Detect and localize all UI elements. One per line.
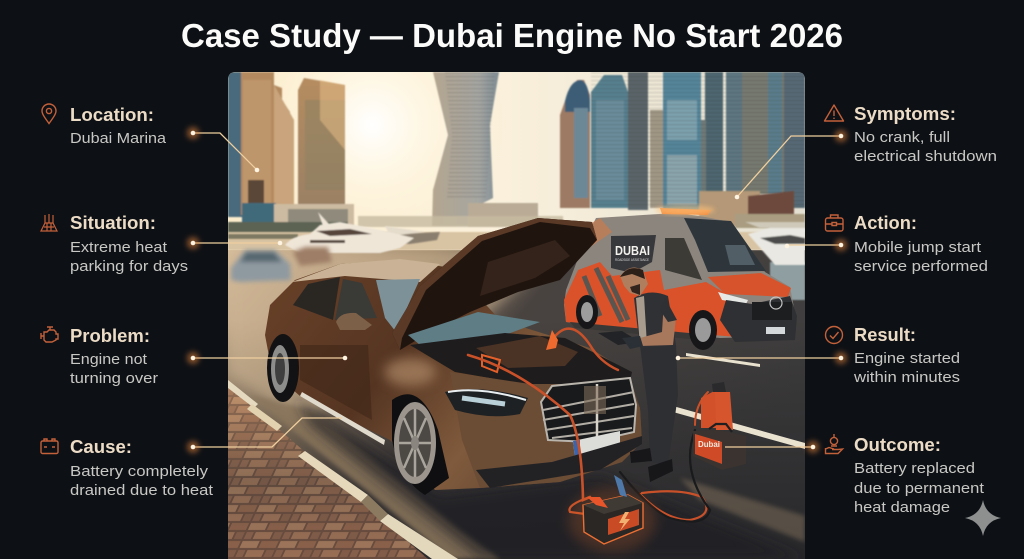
door panel sheen xyxy=(300,345,372,420)
van body xyxy=(564,213,796,338)
icon: engine xyxy=(41,327,58,342)
title: Case Study — Dubai Engine No Start 2026 xyxy=(181,17,843,54)
licence plate xyxy=(573,431,620,459)
callout line: location xyxy=(187,127,259,172)
text block xyxy=(70,351,158,387)
panel: situation xyxy=(41,212,188,275)
windshield xyxy=(684,218,766,272)
panel: location xyxy=(42,104,167,147)
panel: problem xyxy=(41,325,158,387)
low buildings right xyxy=(699,191,805,228)
lower bumper xyxy=(476,436,642,488)
icon: heat over parked car xyxy=(41,214,57,231)
clamp on engine xyxy=(546,330,558,350)
panel: outcome xyxy=(826,434,985,516)
icon: briefcase xyxy=(826,215,843,231)
car body xyxy=(265,260,642,490)
van headlight xyxy=(718,292,748,304)
rear wheel xyxy=(267,334,299,402)
text block xyxy=(854,129,997,165)
text block: heat damage xyxy=(854,499,950,516)
icon: check circle xyxy=(826,326,842,344)
callout line: symptoms xyxy=(735,130,847,199)
text block: Engine started xyxy=(854,350,960,367)
van front and grille xyxy=(720,296,797,342)
light bar xyxy=(660,208,711,215)
heading: Action: xyxy=(854,212,917,233)
head xyxy=(620,268,648,296)
side mirror xyxy=(336,313,372,330)
windshield xyxy=(376,279,420,332)
engine bay red clamp xyxy=(482,355,500,372)
heading: Cause: xyxy=(70,436,132,457)
blurred passing cars xyxy=(231,247,332,282)
text block: service performed xyxy=(854,258,988,275)
panel: cause xyxy=(41,436,214,499)
icon: hand holding part xyxy=(826,434,842,454)
road surface xyxy=(228,250,805,559)
heading: Result: xyxy=(854,324,916,345)
side sill xyxy=(300,392,385,445)
text block: Dubai Marina xyxy=(70,130,167,147)
callout line: result xyxy=(676,352,847,364)
text block: No crank, full xyxy=(854,129,950,146)
side window xyxy=(665,238,702,280)
text block: within minutes xyxy=(853,369,960,386)
waterfront strip xyxy=(228,232,805,300)
callout line: action xyxy=(785,239,847,251)
text block: turning over xyxy=(70,370,158,387)
right skyline towers xyxy=(560,72,805,212)
road markings xyxy=(673,353,805,449)
orange hood xyxy=(708,273,791,297)
shadow under car xyxy=(295,398,805,559)
text block xyxy=(70,463,214,499)
brick pavement and curb xyxy=(228,380,458,559)
engine cover xyxy=(476,336,578,368)
text block: electrical shutdown xyxy=(854,148,997,165)
text block xyxy=(853,350,960,386)
panel: action xyxy=(826,212,988,275)
portable jump pack and extinguishers xyxy=(693,382,746,470)
heading: Situation: xyxy=(70,212,156,233)
front bumper and nose xyxy=(450,372,642,488)
engine bay xyxy=(410,333,632,384)
legs xyxy=(640,345,678,465)
jump cables xyxy=(468,329,710,522)
yachts xyxy=(285,212,440,253)
heading: Problem: xyxy=(70,325,150,346)
icon: battery xyxy=(41,439,58,454)
text block xyxy=(70,239,188,275)
twisted tower xyxy=(358,72,563,227)
van xyxy=(564,205,797,350)
van wheels xyxy=(576,295,598,329)
van lettering: ROADSIDE ASSISTANCE xyxy=(615,257,649,262)
text block: drained due to heat xyxy=(70,482,214,499)
rear windows xyxy=(293,277,340,320)
portable jump pack and extinguishers: Dubai xyxy=(698,440,720,449)
van lettering xyxy=(615,246,650,261)
panel: result xyxy=(826,324,960,386)
warm asphalt along the curb xyxy=(250,395,500,559)
arm xyxy=(640,300,676,346)
grille xyxy=(541,378,636,442)
side door panel xyxy=(611,235,656,273)
callout line: outcome xyxy=(725,441,819,453)
headlight xyxy=(445,389,528,416)
torso xyxy=(634,292,676,348)
boots xyxy=(630,448,652,463)
callout line: situation xyxy=(187,237,282,249)
callout line: cause xyxy=(187,418,342,453)
text block xyxy=(854,460,985,516)
icon: sparkle xyxy=(965,500,1001,536)
highlight on front fender xyxy=(384,358,436,386)
van lettering: DUBAI xyxy=(615,243,650,258)
tablet xyxy=(598,331,640,345)
panel: symptoms xyxy=(824,103,997,165)
road sunlit band xyxy=(228,250,524,414)
text block xyxy=(854,239,988,275)
text block: due to permanent xyxy=(854,480,985,497)
text block: Battery replaced xyxy=(854,460,975,477)
heading: Outcome: xyxy=(854,434,941,455)
icon: map pin xyxy=(42,104,56,124)
main car: brown Mercedes sedan xyxy=(265,218,642,495)
heading: Symptoms: xyxy=(854,103,956,124)
windshield below hood xyxy=(408,312,540,345)
sunlit streak on asphalt xyxy=(680,478,805,542)
raised hood xyxy=(392,218,597,350)
roof xyxy=(292,259,440,282)
heading: Location: xyxy=(70,104,154,125)
text block: Mobile jump start xyxy=(854,239,982,256)
text block: parking for days xyxy=(70,258,188,275)
right yacht xyxy=(745,222,805,265)
left skyline towers xyxy=(228,72,354,234)
text block: Extreme heat xyxy=(70,239,168,256)
front wheel xyxy=(392,394,449,495)
sky with sun xyxy=(228,72,805,250)
photo panel: Dubai Marina roadside scene xyxy=(228,72,805,559)
technician xyxy=(598,268,678,482)
callout line: problem xyxy=(187,352,347,364)
text block: Battery completely xyxy=(70,463,209,480)
icon: warning triangle xyxy=(824,105,844,121)
text block: Engine not xyxy=(70,351,148,368)
battery xyxy=(568,475,656,552)
